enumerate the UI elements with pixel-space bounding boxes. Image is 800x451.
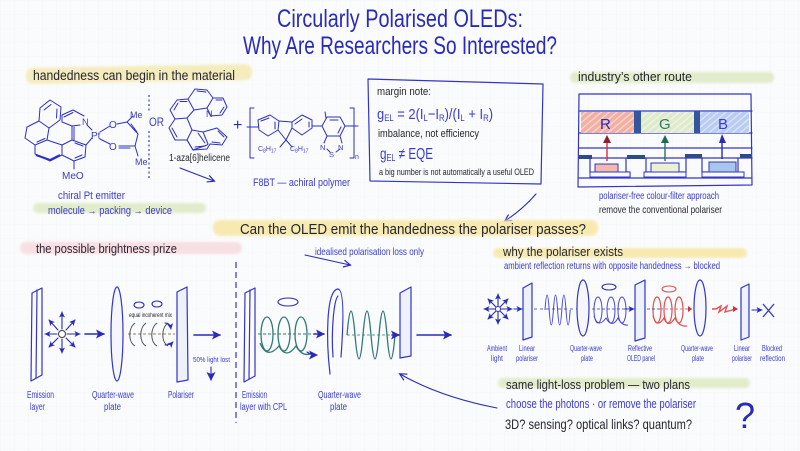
chemical structure: chiral Pt emitter: Me: [130, 110, 143, 120]
formula: g_EL definition: R: [483, 113, 489, 123]
arrow: margin note to question: [505, 194, 536, 221]
arrow: red emission: [603, 135, 611, 161]
labels: OLED panel: [627, 354, 655, 363]
chemical structure: chiral Pt emitter: N: [82, 117, 88, 127]
chemical structure: chiral Pt emitter: Pt: [91, 131, 101, 142]
chemical structure: F8BT polymer: C: [258, 146, 263, 153]
formula: g_EL definition: L: [424, 113, 428, 123]
filter: blue: [700, 112, 749, 133]
panel: why the polariser exists: [484, 244, 785, 363]
filter: red: [581, 112, 634, 133]
labels: plate: [104, 402, 121, 413]
quarter-wave plate arch: [328, 289, 343, 374]
panel: margin note: [368, 79, 543, 184]
chemical structure: F8BT polymer: 8: [295, 148, 298, 154]
panel: the possible brightness prize: [20, 241, 242, 413]
formula: g_EL definition: L: [460, 113, 465, 123]
arrow: [417, 334, 451, 336]
chemical structure: F8BT polymer: N: [320, 143, 325, 152]
caption: remove the polariser: remove the conventional polariser: [599, 204, 722, 216]
labels: Reflective: [628, 344, 652, 353]
heading: handedness: handedness can begin in the material: [33, 67, 235, 83]
formula: g_EL definition: EL: [384, 113, 394, 123]
filter: green: G: [659, 116, 671, 133]
formula: g_EL definition: ): [489, 106, 493, 123]
emission layer: [31, 288, 42, 381]
labels: polariser: [516, 354, 538, 363]
diagram: colour filter stack: [578, 94, 752, 187]
heading: same light-loss problem — two plans: [506, 377, 690, 392]
caption: polariser-free approach: polariser-free colour-filter approach: [599, 191, 719, 202]
arrow to blocked: [752, 309, 762, 311]
reflective OLED panel: [635, 280, 645, 341]
chemical structure: F8BT polymer: 8: [263, 148, 266, 154]
divider: OR: [146, 95, 166, 178]
labels: Quarter-wave: [570, 344, 602, 353]
plus sign: +: [233, 117, 242, 134]
chemical structure: F8BT polymer: 17: [303, 148, 309, 154]
labels: Polariser: [168, 390, 194, 401]
incoherent mix helix: equal incoherent mix: [129, 312, 173, 319]
chemical structure: F8BT polymer: H: [298, 146, 303, 153]
labels: Emission: [242, 390, 267, 401]
chemical structure: F8BT polymer: F8BT — achiral polymer: [253, 177, 350, 189]
central question: Can the OLED emit the handedness the polariser passes?: [240, 222, 586, 238]
helix: [592, 284, 634, 325]
arrow: [194, 334, 220, 336]
blocked X: [763, 304, 774, 317]
linear polariser: [523, 283, 532, 340]
incoherent mix helix: [128, 301, 175, 346]
labels: polariser: [732, 354, 752, 363]
formula: g_EL definition: + I: [465, 106, 483, 123]
labels: plate: [581, 354, 593, 363]
panel: industry's other route: [570, 69, 774, 216]
heading: industry's other route: [570, 69, 774, 84]
chemical structure: chiral Pt emitter: MeO: [62, 171, 84, 182]
labels: [27, 390, 194, 413]
polariser: [400, 287, 411, 358]
chemical structure: F8BT polymer: S: [329, 150, 334, 159]
formula: g_EL definition: −I: [428, 106, 439, 123]
labels: Quarter-wave: [681, 344, 713, 353]
heading: the possible brightness prize: [36, 241, 177, 256]
arrow: blue emission: [719, 134, 726, 159]
chemical structure: F8BT polymer: [247, 108, 359, 189]
polariser: [177, 287, 188, 382]
emission layer with CPL: [244, 288, 255, 382]
dashed divider: [235, 262, 237, 423]
labels: [240, 390, 361, 413]
labels: [487, 344, 785, 363]
ambient light burst: [484, 294, 522, 324]
heading: industry's other route: industry’s other route: [578, 69, 692, 84]
chemical structure: 1-aza[6]helicene: N: [206, 109, 212, 119]
question mark: ?: [735, 395, 755, 436]
title: Circularly Polarised OLEDs:: [277, 5, 523, 33]
labels: Quarter-wave: [92, 390, 134, 401]
reflected red helix: [647, 286, 692, 326]
50% light lost: [193, 355, 231, 380]
labels: plate: [330, 402, 347, 413]
labels: plate: [692, 354, 704, 363]
panel: same light-loss problem: [400, 374, 755, 436]
50% light lost: 50% light lost: [193, 355, 231, 364]
chemical structure: chiral Pt emitter: [25, 100, 148, 182]
formula: g_EL not EQE: g: [380, 146, 389, 163]
caption: molecule packing device: molecule → packing → device: [48, 205, 172, 217]
labels: Linear: [519, 344, 535, 353]
panel: margin note: margin note:: [377, 86, 431, 98]
divider: OR: OR: [149, 115, 164, 129]
quarter-wave plate: [111, 287, 123, 381]
arrow: green emission: [661, 135, 669, 161]
quarter-wave plate: [577, 280, 589, 336]
labels: reflection: [760, 354, 785, 363]
linear polariser: [741, 284, 749, 340]
chemical structure: F8BT polymer: 17: [271, 148, 277, 154]
formula: g_EL not EQE: EL: [387, 153, 396, 164]
labels: Blocked: [762, 344, 782, 353]
text: applications: 3D? sensing? optical links? quantum?: [505, 416, 692, 432]
labels: layer: [30, 402, 45, 413]
red zigzag: [712, 306, 738, 312]
formula: g_EL definition: )/(I: [445, 106, 460, 123]
chemical structure: 1-aza[6]helicene: [169, 89, 230, 181]
light source burst: [45, 312, 80, 353]
caption: chiral Pt emitter: chiral Pt emitter: [58, 190, 125, 202]
chemical structure: 1-aza[6]helicene: 1-aza[6]helicene: [169, 153, 230, 164]
TFT layers: [579, 154, 751, 177]
formula: g_EL definition: g: [377, 106, 385, 123]
labels: Emission: [27, 390, 54, 401]
text: choose the photons: choose the photons · or remove the polariser: [506, 397, 696, 411]
formula: g_EL definition: R: [439, 113, 445, 123]
heading: why the polariser exists: [502, 244, 623, 259]
chemical structure: chiral Pt emitter: O: [109, 120, 117, 131]
linear wave: [347, 311, 399, 359]
filter: green: [641, 112, 694, 133]
panel: margin note: imbalance, not efficiency: [378, 128, 479, 140]
filter: red: R: [600, 116, 611, 133]
chemical structure: chiral Pt emitter: Me: [135, 157, 148, 167]
chemical structure: F8BT polymer: H: [266, 146, 271, 153]
labels: Linear: [734, 344, 750, 353]
arrow: [85, 333, 104, 335]
title: Why Are Researchers So Interested?: [243, 32, 557, 60]
chemical structure: F8BT polymer: n: [355, 154, 359, 161]
panel: margin note: a big number is not automatically a useful OLED: [379, 167, 534, 178]
formula: g_EL not EQE: ≠ EQE: [395, 146, 433, 163]
arrow: back to CPL path: [400, 374, 497, 408]
chemical structure: F8BT polymer: C: [290, 146, 295, 153]
linear wave: [534, 295, 577, 325]
title: [243, 5, 557, 60]
CPL helix: [258, 298, 324, 355]
heading: [493, 244, 747, 259]
labels: Quarter-wave: [318, 390, 361, 401]
formula: g_EL definition: = 2(I: [394, 106, 424, 123]
panel: handedness can begin in the material: [25, 64, 359, 217]
subheading: ambient reflection returns with opposite handedness → blocked: [504, 261, 720, 272]
panel: CPL emitter path: [240, 246, 451, 413]
labels: layer with CPL: [240, 402, 287, 413]
chemical structure: chiral Pt emitter: O: [109, 142, 117, 153]
filter: blue: B: [718, 116, 728, 133]
labels: light: [491, 354, 504, 363]
chemical structure: F8BT polymer: N: [338, 143, 343, 152]
note: idealised polarisation loss only: idealised polarisation loss only: [315, 246, 425, 258]
labels: Ambient: [487, 344, 508, 353]
quarter-wave plate: [694, 280, 706, 336]
note: idealised polarisation loss only: [305, 246, 425, 265]
